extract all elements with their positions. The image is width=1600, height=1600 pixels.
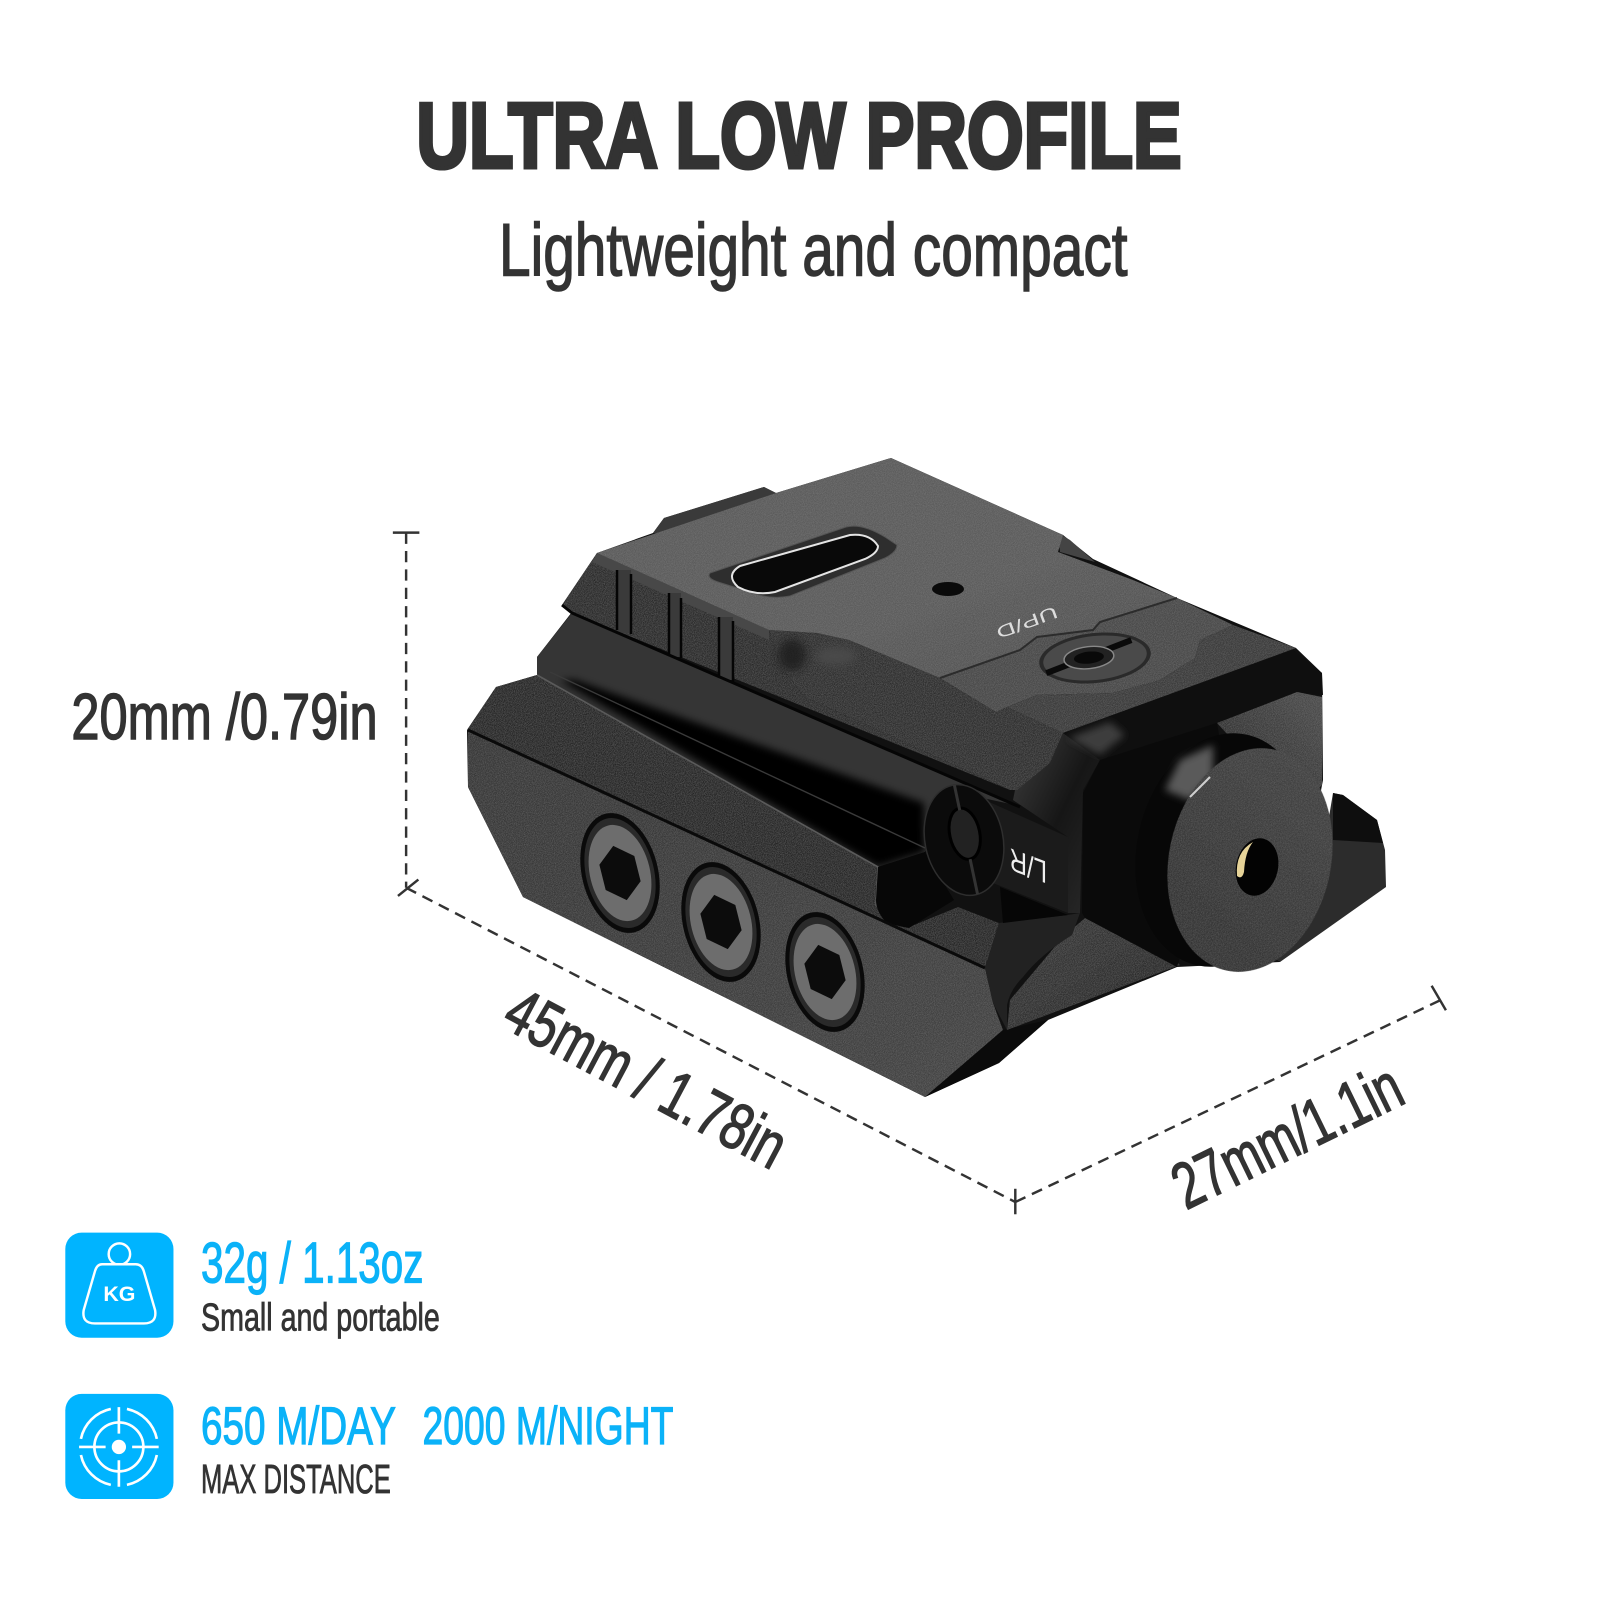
front disc [1147,733,1353,987]
icon: weight: KG [103,1282,135,1306]
length dimension line [406,888,1015,1202]
night range: 2000 M/NIGHT [422,1397,673,1456]
USB-C port [709,526,897,597]
mid band shadow [560,680,925,867]
barrel shell [1114,717,1330,983]
front chamfer band [1063,650,1323,760]
elevation screw [1037,627,1153,689]
windage dial [914,777,1014,903]
L/R label: L/R [1010,840,1047,889]
aperture [1230,834,1284,900]
scoop light [816,647,856,665]
screw 1 [568,805,672,941]
weight value: 32g / 1.13oz [201,1232,423,1296]
rib 2 [669,593,681,658]
rim highlight [1190,777,1210,797]
product: laser sight [467,458,1386,1097]
rear mount upper shade [1333,793,1383,843]
height dimension line [393,533,419,896]
scoop [769,630,1063,790]
scoop dark hollow [778,639,806,671]
lower corner chamfer [985,913,1080,1030]
rib block [562,553,1020,807]
screw 3 [773,904,877,1040]
block seam [562,605,1020,807]
rib 3 [719,617,733,682]
rib 1 [617,570,631,634]
day range: 650 M/DAY [201,1397,396,1456]
distance caption: MAX DISTANCE [201,1456,391,1502]
subtitle: Lightweight and compact [499,209,1128,292]
plate top seam [468,730,985,968]
lip [592,553,769,640]
width dimension line [1015,986,1446,1214]
bottom chamfer [925,1020,1048,1097]
title: ULTRA LOW PROFILE [416,83,1182,187]
recess [876,852,954,928]
mid band [537,613,1015,867]
L/R band [978,797,1068,913]
front cap [1007,625,1296,733]
end block bottom plate [1007,918,1180,1030]
UP/D label: UP/D [994,602,1060,642]
reset hole [932,582,964,596]
section seam [940,598,1177,678]
rail edge highlight [537,675,889,923]
rear tab [653,487,776,535]
rail [467,675,999,968]
laser barrel [1114,717,1353,987]
barrel sheen [1165,745,1213,800]
top plate front section [940,598,1233,712]
rear mount [1273,793,1386,962]
height label: 20mm /0.79in [71,680,378,753]
weight caption: Small and portable [201,1297,440,1340]
shadow wedge under band [1000,887,1068,923]
chamfer sheen [1068,722,1125,755]
gold emitter glint [1237,842,1253,877]
body silhouette [467,458,1323,1097]
channel line [550,672,925,848]
end block left chamfer [1013,733,1100,913]
width label: 27mm/1.1in [1160,1049,1414,1223]
rear bump [1058,533,1095,562]
icon: weight [65,1233,173,1338]
lower plate with screws [468,730,1048,1097]
screw 2 [669,854,773,990]
end block dark mass [1082,723,1230,967]
icon: target [65,1394,173,1499]
length label: 45mm / 1.78in [493,974,799,1183]
end face [1217,692,1322,805]
top plate [597,458,1177,678]
